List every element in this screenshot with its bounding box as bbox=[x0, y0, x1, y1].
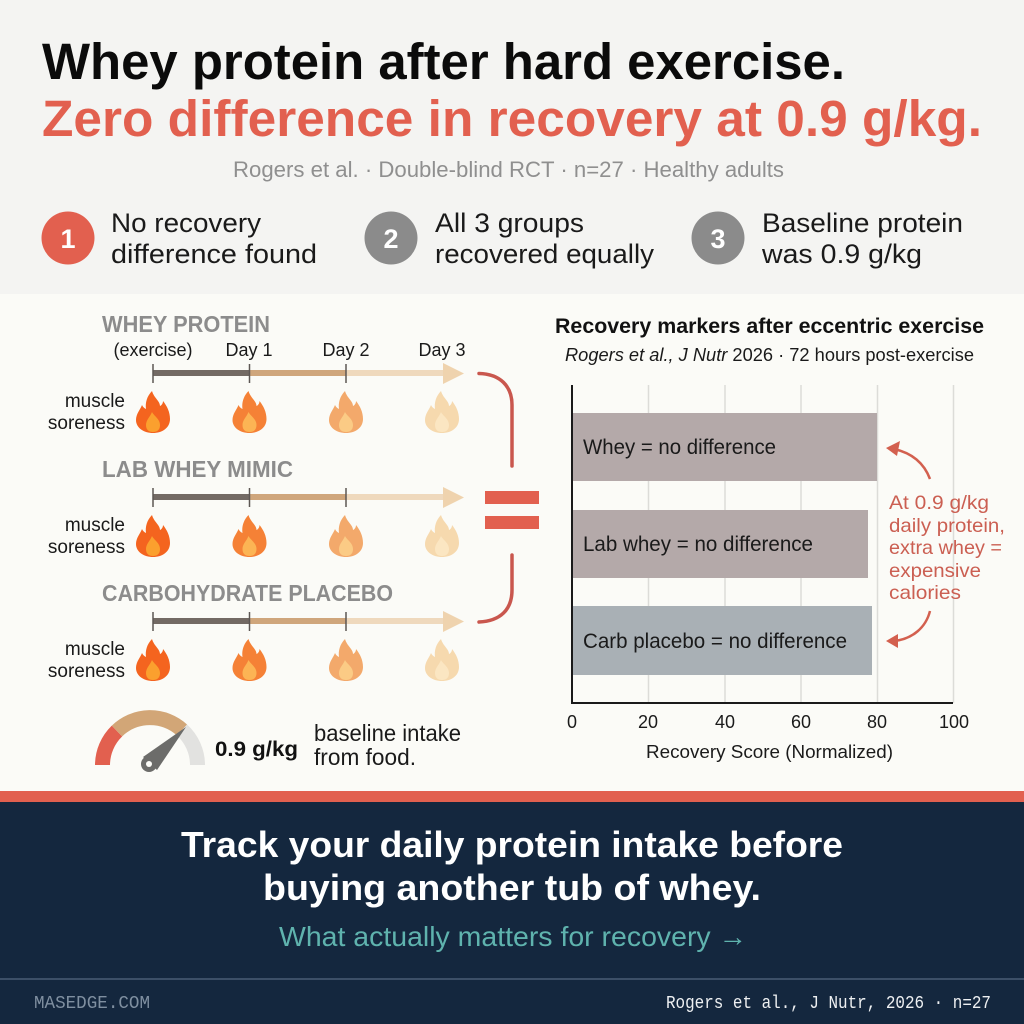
gauge value: 0.9 g/kg bbox=[215, 738, 298, 761]
title bbox=[42, 33, 982, 147]
key finding 1: difference found bbox=[111, 239, 317, 269]
panel: whey protein timeline bbox=[48, 311, 466, 434]
axis labels: 40 bbox=[715, 712, 735, 732]
title: Whey protein after hard exercise. bbox=[42, 33, 845, 90]
panel: carbohydrate placebo timeline: soreness bbox=[48, 661, 125, 682]
key finding 2: recovered equally bbox=[435, 239, 654, 269]
callout: At 0.9 g/kg bbox=[889, 492, 989, 514]
panel: lab whey mimic timeline: soreness bbox=[48, 537, 125, 558]
panel: lab whey mimic timeline bbox=[48, 456, 464, 558]
callout: extra whey = bbox=[889, 537, 1002, 559]
call to action heading: Track your daily protein intake before bbox=[181, 824, 843, 865]
panel: carbohydrate placebo timeline: muscle bbox=[65, 639, 125, 660]
key finding 2 bbox=[364, 208, 654, 269]
icon: flames bbox=[136, 639, 459, 681]
call to action heading: buying another tub of whey. bbox=[263, 867, 761, 908]
title: Zero difference in recovery at 0.9 g/kg. bbox=[42, 90, 982, 147]
bar: whey: Whey = no difference bbox=[583, 436, 776, 459]
key finding 3: was 0.9 g/kg bbox=[761, 239, 922, 269]
panel: whey protein timeline: Day 2 bbox=[322, 340, 370, 360]
divider stripe bbox=[0, 791, 1024, 802]
panel: lab whey mimic timeline: LAB WHEY MIMIC bbox=[102, 456, 293, 482]
axis labels: 60 bbox=[791, 712, 811, 732]
bar chart bbox=[567, 385, 969, 762]
axis labels: 20 bbox=[638, 712, 658, 732]
panel: whey protein timeline: (exercise) bbox=[113, 340, 193, 360]
callout: calories bbox=[889, 582, 961, 604]
key finding 3: 3 bbox=[710, 224, 726, 254]
footer citation: Rogers et al., J Nutr, 2026 · n=27 bbox=[666, 994, 991, 1014]
arrow: up to bars bbox=[886, 441, 930, 479]
panel: whey protein timeline: Day 1 bbox=[225, 340, 273, 360]
panel: whey protein timeline: muscle bbox=[65, 391, 125, 412]
call to action heading bbox=[181, 824, 843, 908]
panel: lab whey mimic timeline: muscle bbox=[65, 515, 125, 536]
footer brand: MASEDGE.COM bbox=[34, 993, 150, 1014]
bar: carb placebo: Carb placebo = no difference bbox=[583, 630, 847, 653]
key finding 3 bbox=[692, 208, 963, 269]
key finding 1: No recovery bbox=[111, 208, 262, 238]
panel: whey protein timeline: soreness bbox=[48, 413, 125, 434]
panel: carbohydrate placebo timeline: CARBOHYDRATE PLACEBO bbox=[102, 580, 393, 606]
gauge caption: from food. bbox=[314, 744, 416, 770]
chart heading: Recovery markers after eccentric exercise bbox=[555, 315, 984, 338]
bar: lab whey: Lab whey = no difference bbox=[583, 533, 813, 556]
bar: carb placebo bbox=[573, 606, 872, 675]
axis labels: 100 bbox=[939, 712, 969, 732]
axis labels: 80 bbox=[867, 712, 887, 732]
panel: whey protein timeline: WHEY PROTEIN bbox=[102, 311, 270, 337]
bar: lab whey bbox=[573, 510, 868, 578]
key finding 1: 1 bbox=[60, 224, 76, 254]
axis labels bbox=[567, 712, 969, 732]
panel: call to action bbox=[0, 802, 1024, 1024]
key finding 2: 2 bbox=[383, 224, 399, 254]
key finding 1 bbox=[42, 208, 317, 269]
icon: flames bbox=[136, 515, 459, 557]
gauge caption: baseline intake bbox=[314, 720, 461, 746]
axis title: Recovery Score (Normalized) bbox=[646, 742, 893, 762]
callout: daily protein, bbox=[889, 515, 1005, 537]
call to action link: What actually matters for recovery → bbox=[279, 921, 747, 952]
icon: gauge bbox=[102, 718, 198, 772]
chart subheading: Rogers et al., J Nutr 2026 · 72 hours post-exercise bbox=[565, 345, 974, 365]
bar: whey bbox=[573, 413, 877, 481]
callout: expensive bbox=[889, 560, 981, 582]
key finding 2: All 3 groups bbox=[435, 208, 584, 238]
panel: whey protein timeline: Day 3 bbox=[418, 340, 466, 360]
axis labels: 0 bbox=[567, 712, 577, 732]
gauge caption bbox=[314, 720, 461, 770]
callout bbox=[889, 492, 1005, 604]
subtitle: Rogers et al. · Double-blind RCT · n=27 · Healthy adults bbox=[233, 157, 784, 182]
panel: carbohydrate placebo timeline bbox=[48, 580, 464, 682]
key finding 3: Baseline protein bbox=[762, 208, 963, 238]
arrow: down to bars bbox=[886, 611, 930, 648]
equals bracket bbox=[479, 374, 539, 622]
icon: flames bbox=[136, 391, 459, 433]
